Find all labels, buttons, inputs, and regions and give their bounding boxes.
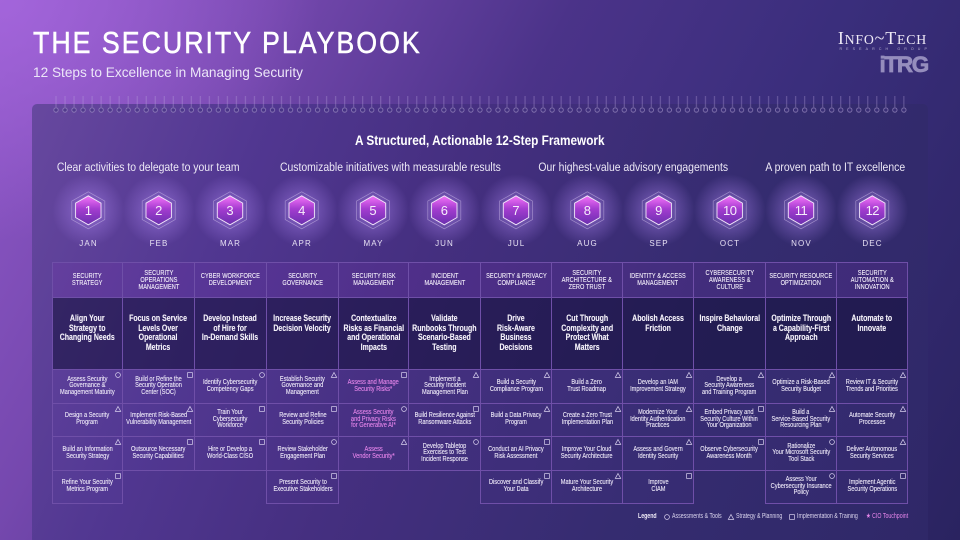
activity: Discover and Classify bbox=[489, 479, 543, 486]
header bbox=[765, 262, 837, 298]
activity: Establish Security bbox=[280, 376, 325, 383]
activity: Assess bbox=[364, 446, 383, 453]
step title: Contextualize bbox=[351, 313, 396, 323]
activity: Security Services bbox=[850, 452, 894, 460]
activity bbox=[480, 369, 552, 404]
step title: Scenario-Based bbox=[418, 332, 471, 342]
activity: Security Awareness bbox=[705, 382, 754, 389]
heading: framework: A Structured, Actionable 12-Step Framework bbox=[355, 133, 605, 148]
legend: Assessments & Tools bbox=[672, 513, 722, 520]
activity bbox=[122, 403, 195, 437]
activity bbox=[338, 436, 409, 471]
activity: Trust Roadmap bbox=[568, 386, 606, 392]
header: SECURITY bbox=[858, 268, 886, 276]
activity: Improve Your Cloud bbox=[562, 446, 612, 453]
activity: and Training Program bbox=[702, 389, 757, 396]
step title bbox=[765, 297, 837, 370]
activity bbox=[765, 369, 837, 404]
step 5 hexagon: 5 bbox=[369, 203, 377, 218]
header bbox=[480, 262, 552, 298]
panel: calendar bbox=[32, 104, 928, 540]
icon: month step hexagons bbox=[58, 178, 905, 242]
header bbox=[52, 262, 123, 298]
step 7 hexagon bbox=[480, 174, 552, 246]
activity: Your Organization bbox=[707, 422, 752, 429]
activity bbox=[266, 470, 339, 504]
activity: Security Capabilities bbox=[133, 452, 184, 460]
step title: Validate bbox=[431, 313, 458, 323]
activity: Implement a bbox=[429, 376, 460, 383]
header bbox=[194, 262, 267, 298]
month label MAR: MAR bbox=[220, 239, 241, 248]
activity: Hire or Develop a bbox=[209, 446, 252, 453]
activity: Security Architecture bbox=[561, 452, 613, 460]
step title: Impacts bbox=[360, 342, 387, 352]
legend: ★ CIO Touchpoint bbox=[866, 513, 908, 520]
legend: Implementation & Training bbox=[797, 513, 858, 520]
header: AUTOMATION & bbox=[850, 276, 894, 284]
step title: Cut Through bbox=[566, 313, 608, 323]
step title: Testing bbox=[432, 342, 457, 352]
activity bbox=[408, 369, 481, 404]
step title bbox=[693, 297, 766, 370]
activity bbox=[551, 403, 623, 437]
activity: Tool Stack bbox=[788, 456, 814, 463]
month label DEC: DEC bbox=[862, 239, 883, 248]
activity: Review and Refine bbox=[279, 412, 326, 419]
activity: Deliver Autonomous bbox=[847, 446, 897, 453]
header: SECURITY RESOURCE bbox=[770, 272, 832, 280]
activity: Management Maturity bbox=[60, 389, 115, 396]
step 4 hexagon: 4 bbox=[298, 203, 305, 218]
step title bbox=[122, 297, 195, 370]
activity bbox=[693, 369, 766, 404]
activity: Refine Your Security bbox=[62, 479, 113, 486]
step title bbox=[480, 297, 552, 370]
step title: of Hire for bbox=[214, 322, 247, 332]
activity bbox=[693, 403, 766, 437]
activity: Risk Assessment bbox=[494, 452, 537, 460]
activity: Cybersecurity bbox=[213, 416, 248, 423]
step title: Friction bbox=[645, 322, 671, 332]
header bbox=[122, 262, 195, 298]
month label JAN: JAN bbox=[79, 239, 98, 248]
activity bbox=[551, 369, 623, 404]
activity: Build or Refine the bbox=[135, 376, 182, 383]
step title: Increase Security bbox=[274, 313, 331, 323]
header: OPERATIONS bbox=[140, 276, 177, 284]
header: ZERO TRUST bbox=[569, 282, 605, 290]
header: SECURITY & PRIVACY bbox=[486, 272, 546, 280]
activity: Mature Your Security bbox=[561, 479, 613, 486]
activity: Security Risks* bbox=[354, 386, 393, 392]
legend bbox=[638, 512, 908, 520]
header: INCIDENT bbox=[431, 272, 458, 280]
header: COMPLIANCE bbox=[497, 279, 535, 287]
activity: Security Operations bbox=[847, 486, 897, 493]
step title bbox=[836, 297, 908, 370]
panel: March column bbox=[195, 262, 266, 471]
step 9 hexagon bbox=[623, 174, 695, 246]
step title: Automate to bbox=[852, 313, 892, 323]
activity bbox=[622, 403, 694, 437]
activity bbox=[836, 369, 908, 404]
logo: Info-Tech Research Group: RESEARCH GROUP bbox=[839, 46, 931, 50]
step title bbox=[551, 297, 623, 370]
activity bbox=[551, 470, 623, 504]
step title bbox=[194, 297, 267, 370]
step title: Risks as Financial bbox=[343, 322, 404, 332]
activity: Governance and bbox=[282, 382, 323, 389]
panel: July column bbox=[480, 262, 551, 504]
step title: Approach bbox=[785, 332, 817, 342]
activity: Vendor Security* bbox=[352, 452, 395, 460]
panel: August column bbox=[552, 262, 622, 504]
step title: Decisions bbox=[499, 342, 532, 352]
activity: Exercises to Test bbox=[423, 449, 466, 456]
logo: Info-Tech Research Group bbox=[838, 28, 931, 77]
activity: Create a Zero Trust bbox=[562, 412, 611, 419]
header bbox=[408, 262, 481, 298]
month label NOV: NOV bbox=[791, 239, 812, 248]
panel: September column bbox=[623, 262, 694, 504]
activity: Assess Your bbox=[785, 476, 817, 483]
activity bbox=[765, 436, 837, 471]
activity: Trends and Priorities bbox=[846, 386, 898, 392]
step title: Develop Instead bbox=[204, 313, 257, 323]
activity: Security Incident bbox=[424, 382, 465, 389]
activity bbox=[194, 436, 267, 471]
step title: Runbooks Through bbox=[412, 322, 477, 332]
header bbox=[622, 262, 694, 298]
activity: Review Stakeholder bbox=[277, 446, 328, 453]
activity: Develop Tabletop bbox=[423, 443, 466, 450]
activity: Management Plan bbox=[422, 389, 467, 396]
activity bbox=[480, 470, 552, 504]
legend: Legend bbox=[638, 513, 656, 520]
activity bbox=[52, 470, 123, 504]
activity bbox=[122, 369, 195, 404]
activity: Improve bbox=[648, 479, 668, 486]
activity: Security Operation bbox=[135, 382, 182, 389]
activity bbox=[122, 436, 195, 471]
step title: Innovate bbox=[858, 322, 886, 332]
header: IDENTITY & ACCESS bbox=[630, 272, 686, 280]
activity: Rationalize bbox=[787, 443, 815, 450]
activity bbox=[765, 403, 837, 437]
panel: January column bbox=[52, 262, 123, 504]
step title: Metrics bbox=[146, 342, 171, 352]
step 5 hexagon bbox=[337, 174, 409, 246]
activity: Conduct an AI Privacy bbox=[488, 446, 544, 453]
header: OPTIMIZATION bbox=[781, 279, 821, 287]
activity: Cybersecurity Insurance bbox=[771, 483, 831, 490]
step 12 hexagon: 12 bbox=[866, 203, 879, 218]
header: CULTURE bbox=[716, 282, 743, 290]
panel: October column bbox=[694, 262, 765, 471]
step title bbox=[408, 297, 481, 370]
step title: Strategy to bbox=[69, 322, 106, 332]
step title: In-Demand Skills bbox=[202, 332, 259, 342]
step 8 hexagon bbox=[551, 174, 623, 246]
activity bbox=[622, 436, 694, 471]
activity: Practices bbox=[646, 422, 670, 429]
activity: Identity Security bbox=[638, 452, 678, 460]
activity: Incident Response bbox=[421, 456, 468, 463]
activity: for Generative AI* bbox=[351, 422, 396, 429]
subtitle: 12 Steps to Excellence in Managing Security bbox=[33, 65, 303, 80]
step 1 hexagon bbox=[52, 174, 124, 246]
activity: Implement Risk-Based bbox=[130, 412, 187, 419]
step title: Drive bbox=[507, 313, 525, 323]
activity bbox=[52, 369, 123, 404]
activity bbox=[836, 436, 908, 471]
step title bbox=[266, 297, 339, 370]
month label JUL: JUL bbox=[508, 239, 525, 248]
step 12 hexagon bbox=[836, 174, 908, 246]
panel: December column bbox=[837, 262, 908, 504]
activity: Optimize a Risk-Based bbox=[772, 379, 830, 386]
step title: Decision Velocity bbox=[274, 322, 331, 332]
activity: Vulnerability Management bbox=[126, 419, 191, 426]
step title: Abolish Access bbox=[632, 313, 684, 323]
activity bbox=[194, 369, 267, 404]
activity bbox=[338, 403, 409, 437]
activity bbox=[836, 403, 908, 437]
activity: Metrics Program bbox=[67, 486, 108, 493]
subheading: IT excellence: A proven path to IT excellence bbox=[765, 160, 905, 174]
month label APR: APR bbox=[292, 239, 312, 248]
activity: Processes bbox=[859, 419, 885, 426]
activity: Identity Authentication bbox=[630, 416, 686, 423]
step 3 hexagon: 3 bbox=[226, 203, 234, 218]
header: MANAGEMENT bbox=[424, 279, 465, 287]
panel: November column bbox=[765, 262, 836, 504]
activity: and Privacy Risks bbox=[351, 416, 396, 423]
activity: Build a Zero bbox=[572, 379, 602, 386]
step 3 hexagon bbox=[194, 174, 266, 246]
activity: Assess Security bbox=[353, 409, 394, 416]
activity: Security Budget bbox=[781, 386, 821, 392]
step title bbox=[338, 297, 409, 370]
header: MANAGEMENT bbox=[638, 279, 678, 287]
activity: Train Your bbox=[218, 409, 243, 416]
activity: Program bbox=[505, 419, 527, 426]
activity bbox=[836, 470, 908, 504]
step title: Change bbox=[717, 322, 742, 332]
activity bbox=[266, 436, 339, 471]
step title: Operational bbox=[139, 332, 178, 342]
header: MANAGEMENT bbox=[138, 282, 179, 290]
step 4 hexagon bbox=[266, 174, 338, 246]
header: MANAGEMENT bbox=[353, 279, 394, 287]
activity: Resourcing Plan bbox=[780, 422, 822, 429]
activity: Assess Security bbox=[67, 376, 108, 383]
activity: Review IT & Security bbox=[846, 379, 898, 386]
header: SECURITY bbox=[573, 268, 601, 276]
step title: Risk-Aware bbox=[497, 322, 535, 332]
title: THE SECURITY PLAYBOOK bbox=[32, 26, 421, 60]
header: GOVERNANCE bbox=[282, 279, 323, 287]
step title: Align Your bbox=[70, 313, 105, 323]
activity: Center (SOC) bbox=[141, 389, 176, 396]
step 7 hexagon: 7 bbox=[512, 203, 520, 218]
activity bbox=[693, 436, 766, 471]
step 10 hexagon bbox=[694, 174, 766, 246]
month label SEP: SEP bbox=[649, 239, 669, 248]
activity: Develop a bbox=[717, 376, 742, 383]
activity bbox=[194, 403, 267, 437]
activity: Implementation Plan bbox=[561, 419, 613, 426]
step title bbox=[622, 297, 694, 370]
icon: spiral binding bbox=[53, 96, 906, 113]
step 11 hexagon: 11 bbox=[795, 203, 808, 218]
step title: Optimize Through bbox=[771, 313, 831, 323]
activity: Build a Security bbox=[496, 379, 536, 386]
step title bbox=[52, 297, 123, 370]
activity: Security Culture Within bbox=[701, 416, 758, 423]
activity bbox=[338, 369, 409, 404]
step title: Focus on Service bbox=[130, 313, 187, 323]
step 10 hexagon: 10 bbox=[723, 203, 737, 218]
step title: Complexity and bbox=[561, 322, 613, 332]
activity: Awareness Month bbox=[707, 452, 752, 460]
step 11 hexagon bbox=[765, 174, 837, 246]
activity bbox=[408, 436, 481, 471]
activity: Outsource Necessary bbox=[131, 446, 186, 453]
activity bbox=[622, 369, 694, 404]
header: INNOVATION bbox=[855, 282, 889, 290]
subheading: initiatives: Customizable initiatives with measurable results bbox=[280, 160, 500, 174]
header: DEVELOPMENT bbox=[209, 279, 252, 287]
activity bbox=[622, 470, 694, 504]
step 2 hexagon: 2 bbox=[155, 203, 162, 218]
activity: Service-Based Security bbox=[772, 416, 830, 423]
activity: Assess and Govern bbox=[633, 446, 683, 453]
activity: World-Class CISO bbox=[207, 452, 254, 460]
header bbox=[836, 262, 908, 298]
header: CYBER WORKFORCE bbox=[201, 272, 260, 280]
legend: Strategy & Planning bbox=[736, 513, 782, 520]
activity: Management bbox=[286, 389, 319, 396]
header bbox=[266, 262, 339, 298]
step title: Inspire Behavioral bbox=[699, 313, 760, 323]
activity bbox=[52, 436, 123, 471]
activity: CIAM bbox=[651, 486, 665, 493]
step 6 hexagon: 6 bbox=[441, 203, 448, 218]
panel: June column bbox=[409, 262, 480, 471]
step title: Changing Needs bbox=[60, 332, 115, 342]
activity: Architecture bbox=[572, 486, 602, 493]
panel: February column bbox=[123, 262, 194, 471]
activity: Security Policies bbox=[282, 419, 323, 426]
activity: Security Strategy bbox=[66, 452, 109, 460]
activity bbox=[408, 403, 481, 437]
activity: Executive Stakeholders bbox=[273, 486, 332, 493]
activity: Workforce bbox=[218, 422, 243, 429]
activity: Competency Gaps bbox=[207, 386, 254, 392]
step title: Protect What bbox=[565, 332, 609, 342]
header bbox=[338, 262, 409, 298]
activity bbox=[765, 470, 837, 504]
activity: Build a Data Privacy bbox=[491, 412, 541, 419]
header: SECURITY bbox=[288, 272, 317, 280]
panel: April column bbox=[266, 262, 339, 504]
header: SECURITY bbox=[73, 272, 102, 280]
header bbox=[693, 262, 766, 298]
step 6 hexagon bbox=[408, 174, 480, 246]
activity: Build an Information bbox=[62, 446, 113, 453]
header: STRATEGY bbox=[72, 279, 103, 287]
activity: Automate Security bbox=[849, 412, 895, 419]
header: CYBERSECURITY bbox=[705, 268, 754, 276]
step title: Levels Over bbox=[139, 322, 178, 332]
logo: Info-Tech Research Group: iTRG bbox=[879, 52, 928, 77]
activity: Present Security to bbox=[279, 479, 326, 486]
step title: Business bbox=[500, 332, 532, 342]
step title: Matters bbox=[575, 342, 599, 352]
month label AUG: AUG bbox=[577, 239, 598, 248]
activity bbox=[480, 403, 552, 437]
activity: Modernize Your bbox=[638, 409, 678, 416]
activity: Build a bbox=[792, 409, 810, 416]
month label OCT: OCT bbox=[720, 239, 740, 248]
activity: Your Data bbox=[504, 486, 528, 493]
activity bbox=[266, 369, 339, 404]
activity: Build Resilience Against bbox=[414, 412, 475, 419]
header: SECURITY bbox=[144, 268, 173, 276]
activity: Ransomware Attacks bbox=[418, 419, 471, 426]
step 9 hexagon: 9 bbox=[655, 203, 662, 218]
month label MAY: MAY bbox=[363, 239, 384, 248]
activity bbox=[266, 403, 339, 437]
activity bbox=[52, 403, 123, 437]
activity: Assess and Manage bbox=[348, 379, 399, 386]
activity: Embed Privacy and bbox=[705, 409, 754, 416]
header: ARCHITECTURE & bbox=[562, 276, 612, 284]
subheading: advisory: Our highest-value advisory engagements bbox=[539, 160, 728, 174]
month label FEB: FEB bbox=[150, 239, 168, 248]
panel: May column bbox=[339, 262, 408, 471]
activity: Compliance Program bbox=[489, 386, 543, 392]
activity: Implement Agentic bbox=[849, 479, 895, 486]
header bbox=[551, 262, 623, 298]
subheading: delegate: Clear activities to delegate to your team bbox=[57, 160, 240, 174]
activity bbox=[480, 436, 552, 471]
logo: Info-Tech Research Group: INFO~TECH bbox=[838, 28, 927, 48]
activity: Design a Security bbox=[65, 412, 110, 419]
activity: Program bbox=[77, 419, 98, 426]
step 1 hexagon: 1 bbox=[85, 203, 92, 218]
activity: Improvement Strategy bbox=[630, 386, 686, 392]
step title: and Operational bbox=[347, 332, 400, 342]
activity: Identify Cybersecurity bbox=[203, 379, 258, 386]
month label JUN: JUN bbox=[435, 239, 454, 248]
header: AWARENESS & bbox=[709, 276, 750, 284]
step 8 hexagon: 8 bbox=[584, 203, 591, 218]
step title: a Capability-First bbox=[773, 322, 829, 332]
header: SECURITY RISK bbox=[352, 272, 395, 280]
activity: Engagement Plan bbox=[280, 452, 325, 460]
activity: Governance & bbox=[69, 382, 106, 389]
activity: Develop an IAM bbox=[638, 379, 678, 386]
step 2 hexagon bbox=[123, 174, 195, 246]
activity: Observe Cybersecurity bbox=[701, 446, 758, 453]
activity: Policy bbox=[793, 489, 809, 496]
activity bbox=[551, 436, 623, 471]
activity: Your Microsoft Security bbox=[772, 449, 830, 456]
